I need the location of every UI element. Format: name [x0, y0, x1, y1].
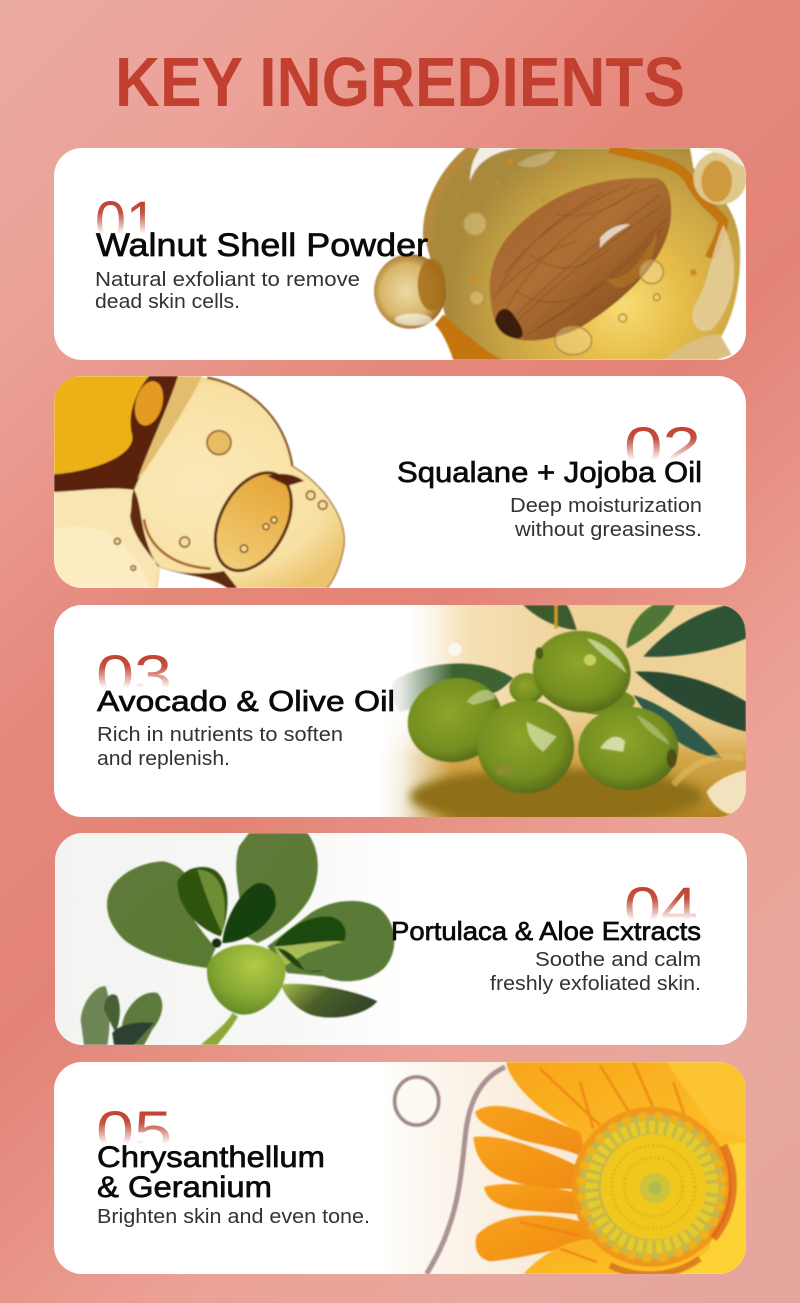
description: Natural exfoliant to remove — [95, 269, 360, 291]
description: and replenish. — [97, 748, 230, 770]
image: nut suspended in oil bubble — [374, 148, 747, 360]
panel: avocado and olive oil — [54, 605, 750, 825]
description: dead skin cells. — [95, 291, 240, 313]
title: KEY INGREDIENTS — [115, 43, 685, 121]
image: golden oil bubbles — [54, 376, 344, 588]
heading: Avocado & Olive Oil: Avocado & Olive Oil — [97, 686, 395, 718]
image: portulaca sprout — [54, 833, 404, 1045]
panel: squalane and jojoba oil — [54, 376, 746, 588]
description: Brighten skin and even tone. — [97, 1206, 370, 1228]
heading: Chrysanthellum & Geranium: & Geranium — [97, 1171, 272, 1204]
image: orange flower with oil drop — [380, 1062, 750, 1275]
number 04: 04 — [624, 875, 698, 938]
description: Soothe and calm — [535, 949, 701, 971]
number 05: 05 — [96, 1099, 172, 1162]
description: freshly exfoliated skin. — [490, 973, 701, 995]
heading: Portulaca & Aloe Extracts: Portulaca & Aloe Extracts — [391, 916, 701, 946]
image: green olives in oil — [380, 605, 750, 825]
heading: Walnut Shell Powder: Walnut Shell Powder — [96, 227, 428, 263]
panel: portulaca and aloe extracts — [54, 833, 747, 1045]
panel: chrysanthellum and geranium — [54, 1062, 750, 1275]
heading: Squalane + Jojoba Oil: Squalane + Jojoba Oil — [397, 457, 702, 489]
panel: walnut shell powder — [54, 148, 747, 360]
number 02: 02 — [624, 415, 701, 478]
description: Deep moisturization — [510, 495, 702, 517]
heading: Chrysanthellum & Geranium: Chrysanthellum — [97, 1141, 325, 1174]
number 01: 01 — [95, 189, 157, 252]
number 03: 03 — [96, 643, 172, 706]
description: Rich in nutrients to soften — [97, 724, 343, 746]
description: without greasiness. — [514, 519, 702, 541]
